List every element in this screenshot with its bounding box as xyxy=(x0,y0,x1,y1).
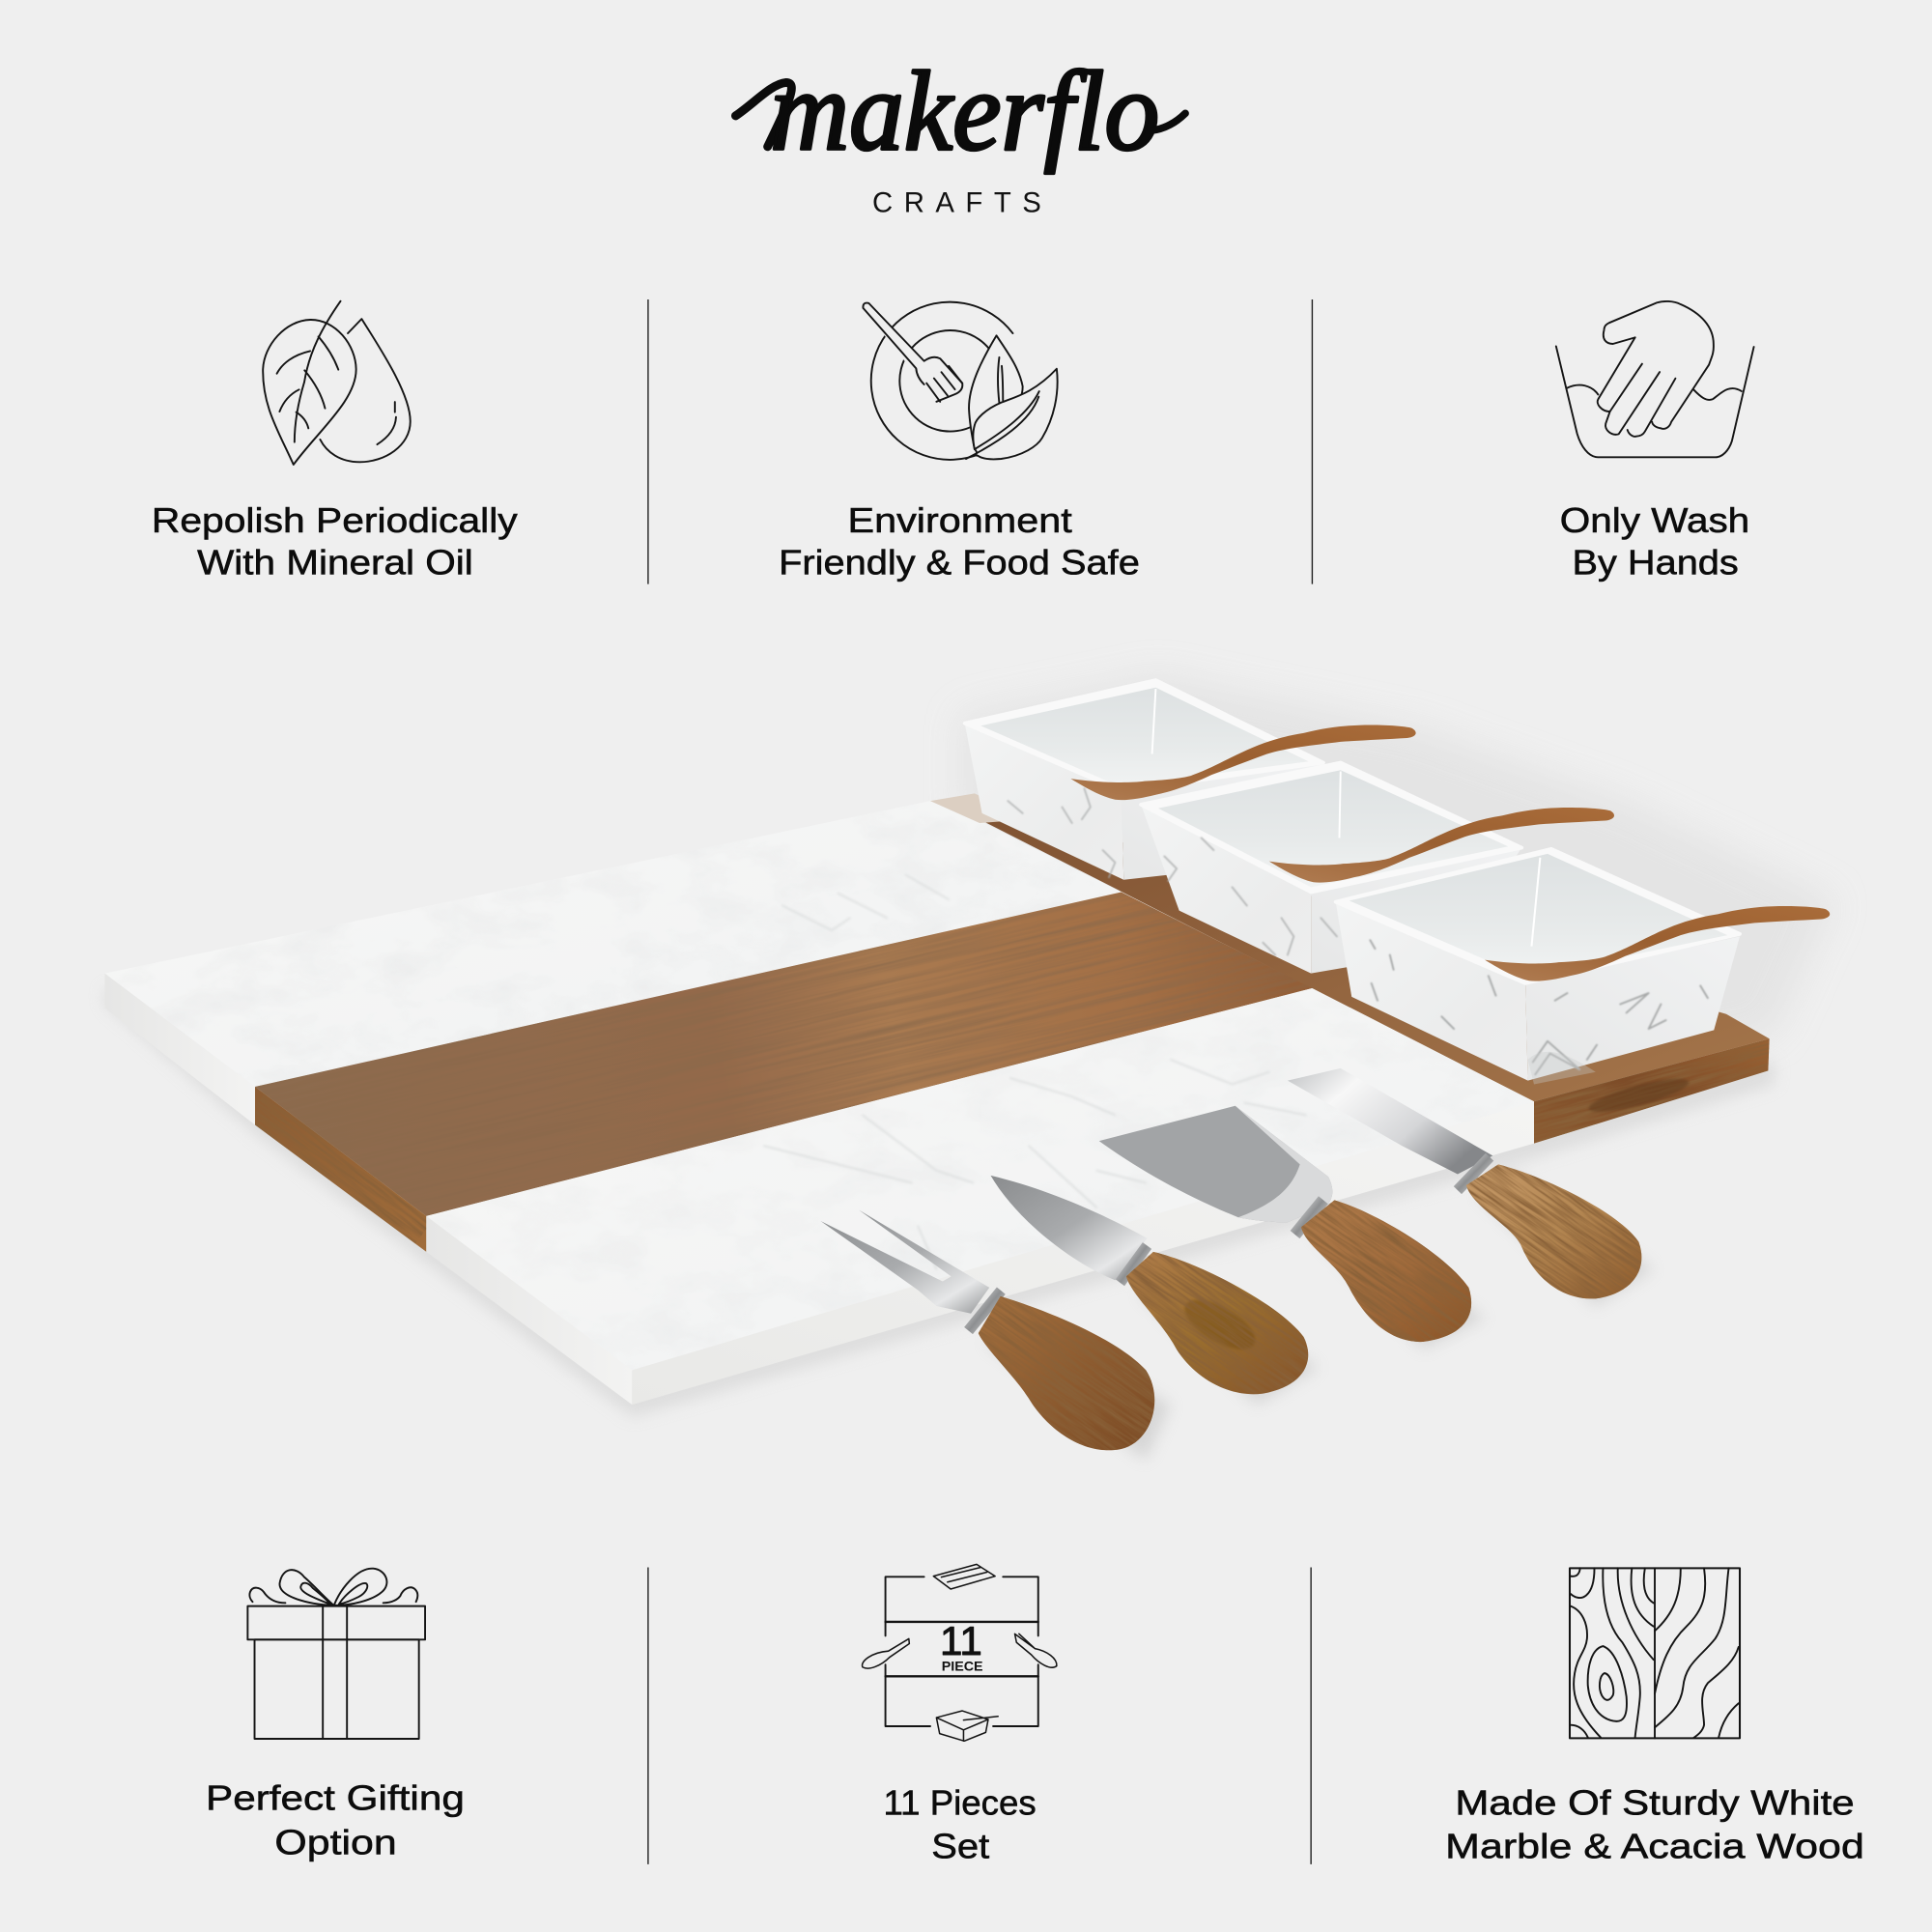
cheese plane xyxy=(1099,1105,1472,1343)
logo: makerflo crafts xyxy=(735,48,1185,218)
marble slab lower strip xyxy=(426,985,1535,1405)
label: materials: Made Of Sturdy White xyxy=(1455,1782,1855,1822)
label: materials: Marble & Acacia Wood xyxy=(1445,1826,1864,1865)
acacia dip tray xyxy=(985,821,1770,1144)
icon: eleven piece badge: PIECE xyxy=(942,1660,983,1675)
icon: eleven piece badge xyxy=(863,1564,1057,1741)
icon: gift box xyxy=(247,1569,425,1739)
icon: eleven piece badge: 11 xyxy=(940,1618,982,1663)
feature: environment friendly xyxy=(779,302,1140,582)
label: environment xyxy=(779,500,1140,582)
feature: repolish with mineral oil xyxy=(152,301,519,582)
ceramic bowl 3 xyxy=(1336,849,1740,1084)
feature: only wash by hands xyxy=(1556,301,1754,582)
feature: perfect gifting xyxy=(206,1569,465,1862)
label: wash xyxy=(1560,500,1749,582)
feature: marble and acacia xyxy=(1445,1568,1864,1865)
ceramic bowl 2 xyxy=(1141,763,1521,974)
knife shadows xyxy=(985,1171,1654,1460)
dividers top xyxy=(648,299,1312,1864)
icon: hand in water bowl xyxy=(1556,301,1754,457)
label: repolish: Repolish Periodically xyxy=(152,500,519,540)
cheese fork xyxy=(821,1209,1155,1451)
label: wash: Only Wash xyxy=(1560,500,1749,540)
feature: 11 pieces set xyxy=(863,1564,1057,1865)
icon: wood grain xyxy=(1570,1568,1740,1738)
label: pieces xyxy=(884,1782,1037,1865)
label: gifting xyxy=(206,1778,465,1862)
label: repolish: With Mineral Oil xyxy=(197,542,473,582)
wooden spoon 2 xyxy=(1269,808,1614,883)
paring knife xyxy=(991,1175,1308,1395)
label: pieces: 11 Pieces xyxy=(884,1782,1037,1822)
label: materials xyxy=(1445,1782,1864,1865)
soft halo shadows xyxy=(104,675,1836,1417)
wooden spoon 3 xyxy=(1485,906,1830,981)
label: environment: Environment xyxy=(848,500,1072,540)
narrow cheese knife xyxy=(1288,1068,1642,1298)
label: pieces: Set xyxy=(931,1826,989,1865)
acacia wood centre strip xyxy=(255,893,1312,1252)
wooden spoon 1 xyxy=(1070,725,1416,800)
logo subtitle: CRAFTS xyxy=(872,186,1041,218)
marble slab top strip xyxy=(104,788,1127,1125)
ceramic bowl 1 xyxy=(965,680,1323,880)
label: gifting: Perfect Gifting xyxy=(206,1778,465,1818)
label: environment: Friendly & Food Safe xyxy=(779,542,1140,582)
product photo illustration xyxy=(104,675,1836,1513)
label: wash: By Hands xyxy=(1573,542,1739,582)
label: repolish xyxy=(152,500,519,582)
icon: leaf and oil drop xyxy=(263,301,411,465)
icon: plate fork and leaves xyxy=(863,302,1058,460)
label: gifting: Option xyxy=(274,1823,397,1862)
logo script wordmark: makerflo xyxy=(770,48,1159,174)
